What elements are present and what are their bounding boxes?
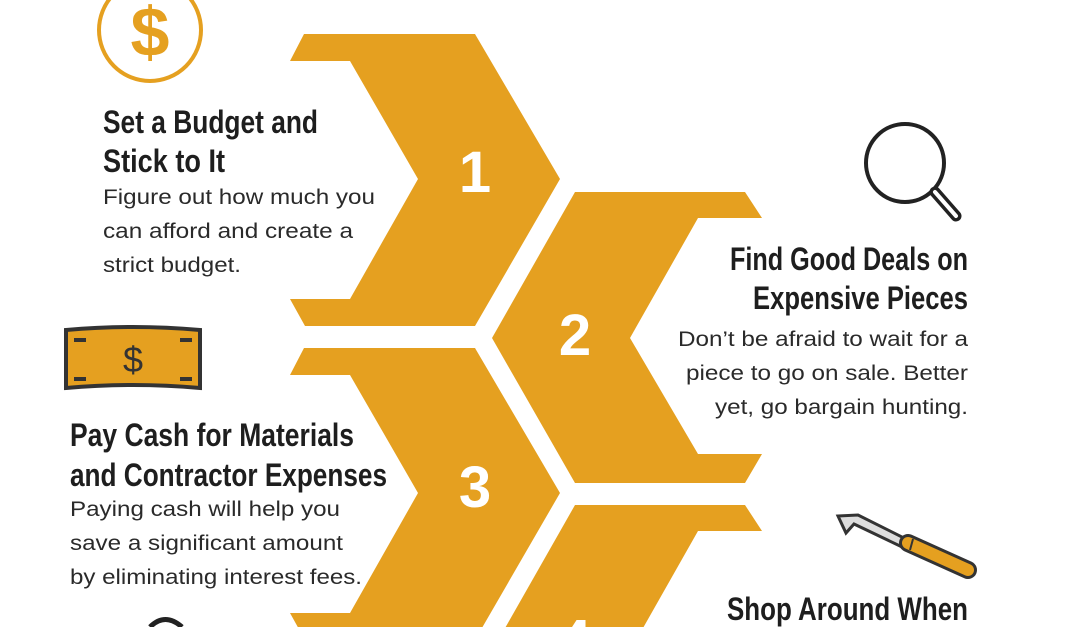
block 2 text <box>678 241 968 419</box>
block 3 text: Paying cash will help you <box>70 498 340 521</box>
block 2 text: Expensive Pieces <box>753 280 968 316</box>
icon: screwdriver <box>838 515 968 570</box>
icon: dollar coin <box>99 0 201 81</box>
number 1: 1 <box>459 140 491 205</box>
icon: money bill <box>66 327 200 388</box>
chevron 4 <box>492 505 762 627</box>
chevron 3 <box>290 348 560 627</box>
block 1 text: can afford and create a <box>103 220 353 243</box>
number 2: 2 <box>559 303 591 368</box>
chevron 1 <box>290 34 560 326</box>
icon: partial bottom-left <box>150 620 182 627</box>
block 1 text: Set a Budget and <box>103 104 318 140</box>
block 1 text: Figure out how much you <box>103 186 375 209</box>
icon: money bill: $ <box>123 339 143 380</box>
block 3 text <box>70 417 387 589</box>
number 3: 3 <box>459 455 491 520</box>
block 4 heading: Shop Around When <box>727 591 968 627</box>
block 3 text: save a significant amount <box>70 532 343 555</box>
block 3 text: by eliminating interest fees. <box>70 566 362 589</box>
chevron 2 <box>492 192 762 483</box>
block 3 text: Pay Cash for Materials <box>70 417 354 453</box>
block 2 text: Don’t be afraid to wait for a <box>678 328 968 351</box>
block 2 text: yet, go bargain hunting. <box>715 396 968 419</box>
block 2 text: Find Good Deals on <box>730 241 968 277</box>
block 3 text: and Contractor Expenses <box>70 457 387 493</box>
block 1 text: Stick to It <box>103 143 225 179</box>
block 1 text: strict budget. <box>103 254 241 277</box>
icon: magnifier <box>866 124 956 216</box>
block 2 text: piece to go on sale. Better <box>686 362 968 385</box>
block 1 text <box>103 104 375 277</box>
